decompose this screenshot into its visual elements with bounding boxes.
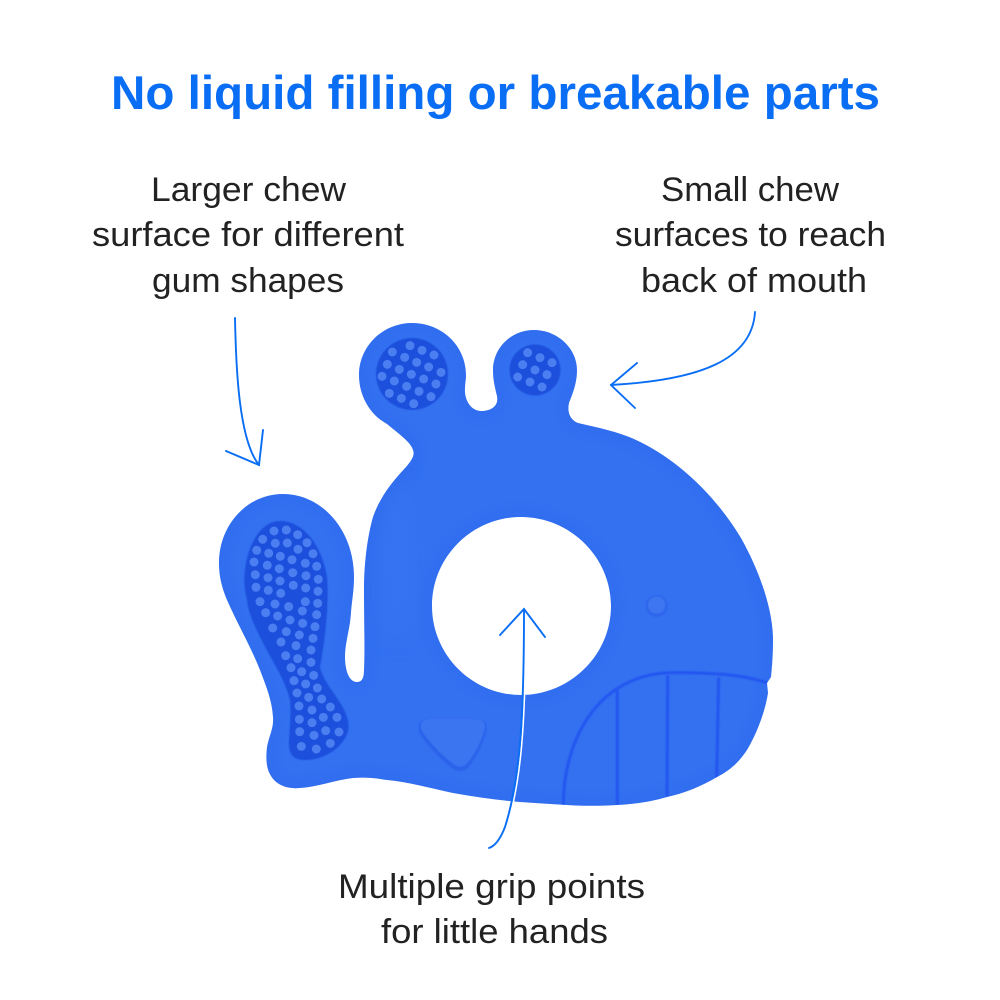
callout: small chew surfaces — [615, 171, 886, 300]
whale teether — [219, 323, 773, 806]
tail chew surface — [244, 521, 349, 760]
whale eye — [646, 595, 668, 617]
left eye chew surface — [376, 338, 448, 410]
whale mouth lines — [563, 673, 767, 804]
callout: small chew surfaces: Small chew — [661, 171, 839, 209]
callout: multiple grip points: Multiple grip points — [338, 868, 645, 906]
callout: multiple grip points: for little hands — [381, 913, 608, 951]
callout: larger chew surface: surface for different — [92, 216, 405, 254]
title: No liquid filling or breakable parts — [111, 66, 880, 119]
arrow: to tail chew surface — [226, 318, 263, 465]
callout: larger chew surface — [92, 171, 405, 300]
callout: small chew surfaces: surfaces to reach — [615, 216, 886, 254]
callout: larger chew surface: gum shapes — [152, 262, 344, 300]
arrow: to eye chew surfaces — [611, 312, 755, 408]
right eye chew surface — [510, 344, 560, 396]
arrow: to centre hole grip — [489, 609, 545, 848]
callout: larger chew surface: Larger chew — [151, 171, 346, 209]
whale fin — [418, 718, 487, 771]
callout: multiple grip points — [338, 868, 645, 951]
callout: small chew surfaces: back of mouth — [641, 262, 867, 300]
